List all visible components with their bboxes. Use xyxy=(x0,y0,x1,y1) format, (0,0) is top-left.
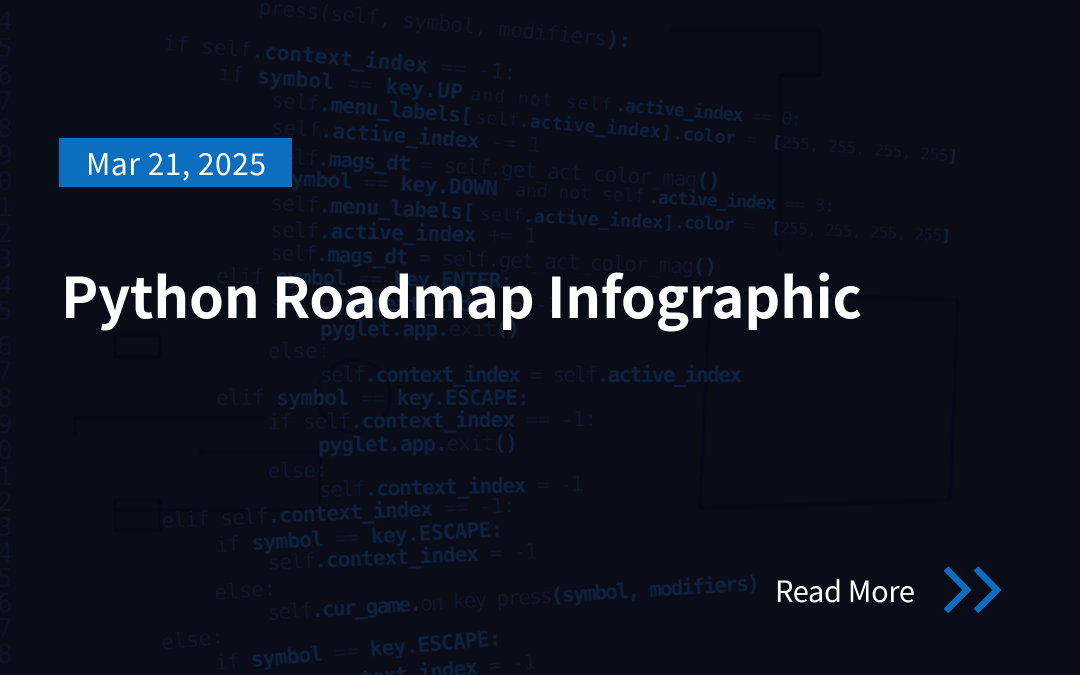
background code lines: [255, 255, 255, 255] xyxy=(771,218,951,245)
background code lines: .color = xyxy=(674,212,755,237)
read more link: Read More xyxy=(775,569,915,611)
background code lines: else: xyxy=(213,576,277,605)
background code lines: self.cur_game.on key press(symbol, modifiers) xyxy=(267,571,760,625)
background code lines: if self.context_index == -1: xyxy=(268,407,597,434)
background code lines: and not self xyxy=(515,180,646,207)
background code lines: if symbol == key.ESCAPE: xyxy=(214,626,502,675)
background code lines: pyglet.app.exit() xyxy=(320,317,520,341)
background code lines: pyglet.app.exit() xyxy=(318,431,518,457)
background code lines: elif symbol == key.ESCAPE: xyxy=(216,386,530,410)
background code lines: self.active_index] xyxy=(480,204,675,234)
background code lines: else: xyxy=(160,624,225,655)
background code lines: self.context_index = -1 xyxy=(270,291,560,317)
background code lines xyxy=(160,0,959,675)
background code lines: self.mags_dt = self.get_act_color_mag() xyxy=(271,144,721,193)
icon: double chevron arrow xyxy=(946,568,997,611)
background code lines: [255, 255, 255, 255] xyxy=(772,132,959,166)
background code lines: .active_index == 3: xyxy=(648,187,836,217)
background circuit lines xyxy=(75,30,958,530)
background code lines: self.active_index -= 1 xyxy=(271,115,542,157)
background code lines: if symbol == key.UP xyxy=(218,61,464,104)
background code lines: self.active_index += 1 xyxy=(270,218,537,248)
background code lines: elif symbol == key.DOWN xyxy=(218,163,499,201)
background code lines: self.context_index = -1 xyxy=(267,539,538,575)
background code lines: self.context_index = -1 xyxy=(319,472,584,502)
background code lines: self.menu_labels[ xyxy=(271,88,474,128)
line numbers column xyxy=(0,7,13,670)
background code lines: self.menu_labels[ xyxy=(270,191,476,224)
background code lines: elif self.context_index == -1: xyxy=(161,493,516,533)
background code lines: self.mags_dt = self.get_act_color_mag() xyxy=(270,241,717,279)
background code lines: .color = xyxy=(672,123,758,151)
background code lines: else: xyxy=(268,458,328,483)
background code lines: and not self xyxy=(470,84,613,116)
background code lines: if symbol == key.ESCAPE: xyxy=(215,517,504,557)
background code lines: .active_index == 0: xyxy=(615,95,803,131)
background code lines: elif symbol == key.ENTER: xyxy=(216,264,513,293)
background code lines: else: xyxy=(268,339,330,363)
background code lines: self.context_index = self.active_index xyxy=(320,363,742,387)
background code lines: self.active_index] xyxy=(475,107,673,144)
date badge xyxy=(59,138,292,187)
background code lines: if self.context_index == -1: xyxy=(163,31,517,85)
title: Python Roadmap Infographic xyxy=(61,254,862,335)
date badge: Mar 21, 2025 xyxy=(86,140,266,184)
